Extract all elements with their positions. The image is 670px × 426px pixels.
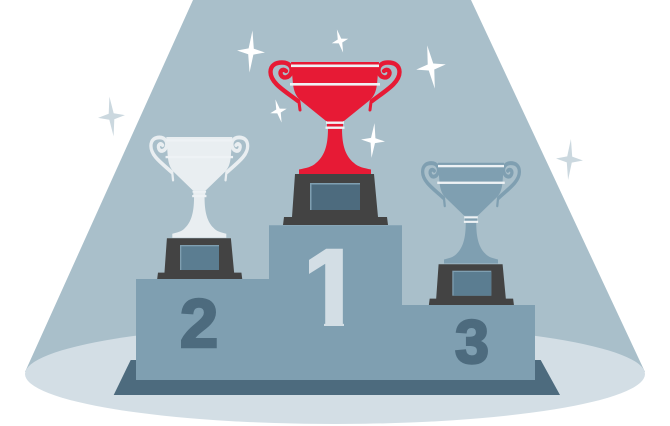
trophy: second place (silver): [151, 137, 248, 279]
plaque: third place: [452, 271, 491, 296]
podium steps: [136, 225, 535, 380]
plaque: second place: [180, 245, 219, 270]
podium shadow base: [114, 360, 560, 395]
trophy: first place (red): [270, 62, 400, 225]
number 3: 3: [455, 308, 489, 376]
number 1: 1: [295, 222, 367, 365]
plaque: first place: [310, 183, 360, 210]
faint sparkles: [96, 95, 584, 181]
floor ellipse: [25, 324, 645, 424]
trophy: third place (blue-grey): [423, 163, 519, 305]
number 2: 2: [180, 285, 218, 362]
sparkles: [236, 27, 450, 159]
